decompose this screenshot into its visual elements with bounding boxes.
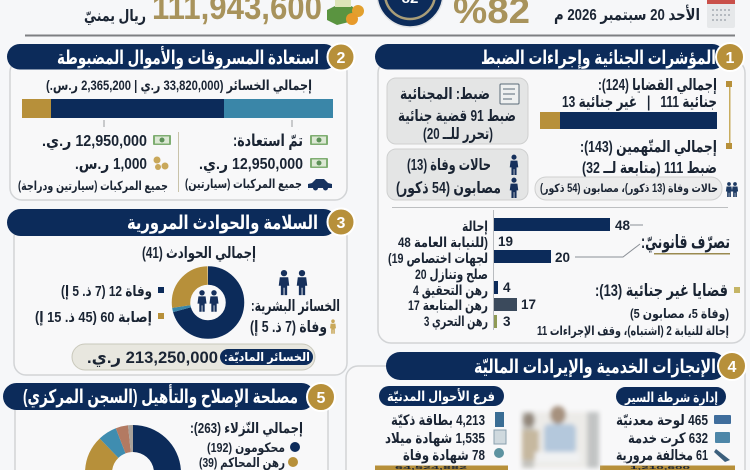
bar chart: legal action: 17 (521, 297, 536, 312)
box: seizure: ضبط: المجنائية (400, 86, 490, 103)
panel 5: prison (3, 383, 335, 470)
bar chart: legal action: رهن المتابعة 17 (408, 297, 488, 314)
box: deaths and injured: حالات وفاة (13) (407, 157, 491, 174)
bar: cases (540, 112, 717, 129)
column: seized: جميع المركبات (سيارتين ودراجة) (18, 179, 168, 193)
bar chart: legal action: إحالة (462, 218, 488, 235)
image: two officers at a desk (522, 406, 599, 468)
panel 2: stolen property recovery (7, 44, 354, 200)
heading 2: استعادة المسروقات والأموال المضبوطة (57, 46, 319, 69)
legend (35, 284, 164, 326)
column: recovered: جميع المركبات (سيارتين) (185, 177, 302, 191)
text: human losses: وفاة (7 ذ. 5 إ) (250, 319, 327, 336)
panel 1: criminal indicators (375, 43, 745, 343)
donut chart: inmates (85, 425, 181, 470)
text: arrested: ضبط 111 (متابعة لــ 32) (582, 160, 717, 177)
bar chart: legal action: صلح وتنازل 20 (415, 266, 488, 283)
sub-panel: traffic police (600, 387, 735, 470)
panel 4: services and revenue (346, 352, 746, 470)
icon: car (308, 179, 332, 191)
text: total accidents: إجمالي الحوادث (41) (142, 245, 256, 263)
column: seized: 12,950,000 ر.ي. (42, 133, 147, 151)
icon: people (726, 182, 738, 197)
bar chart: legal action: 3 (503, 314, 511, 329)
heading 4: 4 (728, 359, 737, 376)
heading 2: 2 (337, 50, 346, 67)
sub-panel: civil status (375, 386, 508, 470)
text: human losses: الخسائر البشرية: (251, 298, 340, 315)
bar chart: legal action: 20 (555, 250, 570, 265)
sub-panel: traffic police: 61 مخالفة مرورية (616, 448, 708, 464)
stacked bar: losses (22, 99, 333, 127)
panel 3: traffic safety (7, 208, 354, 375)
text: total losses: إجمالي الخسائر (33,820,000 ر.ي | 2,365,200 ر.س.) (46, 77, 312, 95)
sub-panel: traffic police: إدارة شرطة السير (624, 390, 718, 405)
heading 5 (3, 383, 335, 411)
box: seizure (387, 78, 528, 144)
box: deaths and injured: مصابون (54 ذكور) (396, 180, 501, 197)
bar chart: legal action: (للنيابة العامة 48 (398, 234, 488, 250)
heading 3 (7, 208, 354, 236)
column: recovered: 12,950,000 ر.ي. (199, 156, 303, 174)
callout: legal action (575, 225, 730, 257)
heading 3: 3 (337, 215, 346, 232)
sub-panel: civil status: فرع الأحوال المدنيّة (387, 388, 495, 404)
heading 1: 1 (726, 50, 735, 67)
badge: percentage circle (377, 0, 443, 27)
legend: inmates (199, 440, 300, 470)
sub-panel: traffic police: 465 لوحة معدنيّة (616, 413, 708, 429)
date: الأحد 20 سبتمبر 2026 م (554, 5, 700, 24)
donut chart: accidents (181, 276, 235, 330)
heading 4 (386, 352, 746, 380)
heading 5: مصلحة الإصلاح والتأهيل (السجن المركزي) (23, 384, 298, 409)
legend: inmates: محكومون (192) (207, 440, 285, 455)
bar chart: legal action: 19 (498, 234, 513, 249)
icon: people in donut (198, 290, 218, 312)
box: deaths and injured (387, 149, 528, 200)
text: non criminal cases (537, 281, 740, 338)
icon: clipboard (500, 84, 519, 104)
column: recovered (185, 132, 332, 191)
bar chart: legal action: 48 (615, 218, 631, 233)
bar chart: legal action: رهن التحقيق 4 (413, 282, 488, 299)
box: seizure: ضبط 91 قضية جنائية (398, 108, 516, 125)
pill: casualties: حالات وفاة (13 ذكور)، مصابون (54 ذكور) (540, 183, 718, 196)
material losses: 213,250,000 ر.ي. (87, 348, 218, 368)
column: seized (18, 133, 171, 193)
sub-panel: civil status: 64,524,882 (395, 465, 469, 470)
text: non criminal cases: (وفاة 5، مصابون 5) (630, 306, 729, 321)
sub-panel: civil status: 1,535 شهادة ميلاد (385, 431, 485, 447)
bar chart: legal action: 4 (503, 280, 511, 295)
sub-panel: civil status: 78 شهادة وفاة (403, 448, 485, 464)
legend: inmates: رهن المحاكم (39) (199, 455, 285, 470)
text: non criminal cases: إحالة للنيابة 2 (اشتباه)، وقف الإجراءات 11 (537, 324, 729, 338)
heading 5: 5 (317, 390, 326, 407)
text: human losses (250, 298, 340, 336)
legend: وفاة 12 (7 ذ. 5 إ) (61, 284, 152, 300)
sub-panel: traffic police: 632 كرت خدمة (628, 431, 708, 447)
legend: إصابة 60 (45 ذ. 15 إ) (35, 310, 152, 326)
material losses: الخسائر الماديّة: (224, 350, 310, 364)
icon: calendar (707, 0, 735, 28)
icon: money and coins (327, 0, 364, 25)
heading 3: السلامة والحوادث المرورية (127, 213, 318, 234)
bar chart: legal action (388, 210, 631, 331)
heading 1 (375, 43, 744, 71)
text: total inmates: إجمالي النّزلاء (263): (190, 421, 303, 437)
pill: casualties (535, 177, 722, 200)
sub-panel: traffic police: 1,210,600 (630, 465, 691, 470)
currency: ريال يمنيّ (84, 8, 146, 26)
box: seizure: (تحرر للــ 20) (423, 126, 493, 143)
column: recovered: تمّ استعادة: (233, 132, 303, 150)
text: total cases: إجمالي القضايا (124): (598, 77, 717, 95)
bar chart: legal action: لجهات اختصاص 19) (388, 250, 488, 267)
text: total accused: إجمالي المتّهمين (143): (580, 138, 717, 157)
text: case split: جنائية 111 | غير جنائية 13 (562, 94, 717, 111)
timeline (726, 81, 732, 149)
sub-panel: civil status: 4,213 بطاقة ذكيّة (391, 413, 485, 429)
bar chart: legal action: رهن التحري 3 (424, 313, 488, 331)
material losses (72, 344, 315, 370)
header: total amount (84, 0, 364, 27)
icon: man and woman (279, 270, 307, 295)
heading 2 (7, 44, 354, 70)
column: seized: 1,000 ر.س. (75, 156, 147, 173)
